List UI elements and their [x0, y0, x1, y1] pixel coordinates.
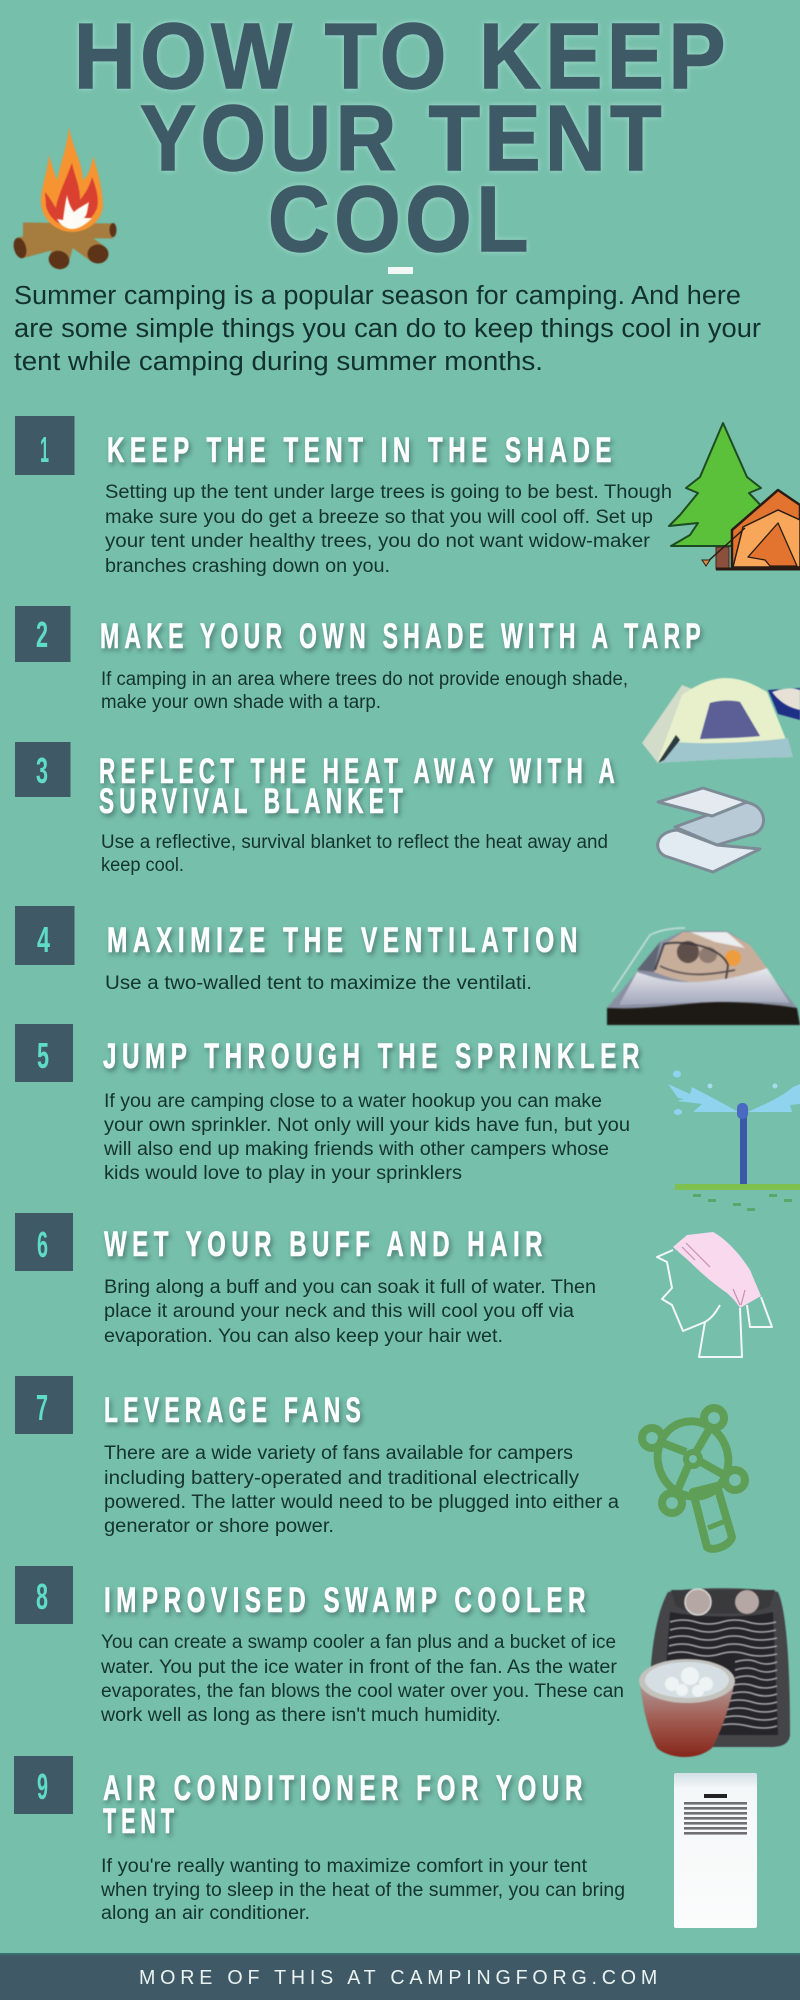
panel: tip 2	[0, 606, 800, 2000]
footer: MORE OF THIS AT CAMPINGFORG.COM	[139, 1966, 662, 1989]
number badge 9	[14, 1756, 73, 1814]
body 9: If you're really wanting to maximize comfort in your tent	[101, 1856, 588, 1877]
decorative dash	[388, 267, 413, 274]
body 2: make your own shade with a tarp.	[101, 692, 381, 713]
panel: tip 6	[15, 1213, 772, 1357]
body 5: your own sprinkler. Not only will your kids have fun, but you	[104, 1115, 630, 1136]
intro text	[14, 282, 762, 376]
number badge 5	[15, 1024, 73, 1082]
icon: dome tent with tarp	[642, 678, 800, 763]
heading 9: AIR CONDITIONER FOR YOUR	[103, 1769, 588, 1808]
body 1: Setting up the tent under large trees is going to be best. Though	[105, 482, 672, 503]
body 3	[101, 832, 608, 876]
body 7: generator or shore power.	[104, 1516, 334, 1537]
body 3: keep cool.	[101, 855, 184, 876]
icon: hand fan	[642, 1408, 745, 1549]
body 5	[103, 1091, 630, 1184]
number badge 3	[15, 742, 70, 797]
body 2: If camping in an area where trees do not provide enough shade,	[101, 669, 628, 690]
body 6: Bring along a buff and you can soak it full of water. Then	[104, 1277, 596, 1298]
icon: tree and tent	[669, 423, 800, 569]
heading 9: TENT	[103, 1802, 179, 1841]
intro text: are some simple things you can do to keep things cool in your	[14, 315, 762, 343]
number badge 1	[15, 416, 74, 475]
icon: heater fan and ice bucket	[639, 1588, 790, 1757]
number badge 2: 2	[36, 614, 48, 655]
title: COOL	[268, 167, 533, 271]
number badge 8	[15, 1566, 73, 1624]
body 1: make sure you do get a breeze so that you will cool off. Set up	[105, 507, 653, 528]
heading 3	[99, 752, 620, 821]
number badge 3: 3	[36, 750, 48, 791]
number badge 2	[15, 606, 70, 662]
body 9: when trying to sleep in the heat of the summer, you can bring	[100, 1880, 625, 1901]
body 1: branches crashing down on you.	[105, 556, 390, 577]
body 8: water. You put the ice water in front of the fan. As the water	[100, 1657, 618, 1678]
body 5: will also end up making friends with other campers whose	[103, 1139, 609, 1160]
heading 4: MAXIMIZE THE VENTILATION	[107, 921, 583, 960]
heading 3: SURVIVAL BLANKET	[99, 782, 408, 821]
number badge 7: 7	[36, 1387, 48, 1428]
panel: tip 1	[15, 416, 800, 577]
icon: head wearing buff	[657, 1232, 772, 1357]
body 5: kids would love to play in your sprinklers	[104, 1163, 462, 1184]
body 8: work well as long as there isn't much humidity.	[100, 1705, 501, 1726]
title: HOW TO KEEP	[74, 4, 730, 108]
icon: tent at sunset	[607, 928, 800, 1025]
intro text: tent while camping during summer months.	[14, 348, 543, 376]
heading 7: LEVERAGE FANS	[104, 1391, 366, 1430]
heading 8: IMPROVISED SWAMP COOLER	[104, 1581, 591, 1620]
body 2	[101, 669, 628, 713]
body 5: If you are camping close to a water hookup you can make	[104, 1091, 602, 1112]
footer	[0, 1953, 800, 2000]
body 7: including battery-operated and traditional electrically	[104, 1468, 580, 1489]
number badge 8: 8	[36, 1576, 48, 1617]
icon: survival blanket	[658, 788, 764, 872]
number badge 1: 1	[40, 429, 49, 470]
heading 9	[103, 1769, 588, 1841]
number badge 7	[15, 1376, 73, 1434]
panel: tip 8	[15, 1566, 790, 1757]
panel: tip 3	[15, 742, 764, 876]
body 9: along an air conditioner.	[101, 1903, 310, 1924]
body 6	[104, 1277, 596, 1347]
intro text: Summer camping is a popular season for camping. And here	[14, 282, 741, 310]
number badge 5: 5	[37, 1035, 49, 1076]
title	[74, 4, 730, 271]
body 8: evaporates, the fan blows the cool water over you. These can	[101, 1681, 624, 1702]
number badge 4: 4	[37, 919, 50, 960]
panel: tip 7	[15, 1376, 745, 1549]
number badge 9: 9	[37, 1766, 48, 1807]
body 7: powered. The latter would need to be plugged into either a	[104, 1492, 619, 1513]
icon: campfire	[11, 126, 116, 272]
body 1	[105, 482, 672, 577]
number badge 4	[15, 906, 74, 965]
body 4: Use a two-walled tent to maximize the ventilati.	[105, 973, 532, 994]
heading 6: WET YOUR BUFF AND HAIR	[104, 1225, 548, 1264]
body 8	[100, 1632, 624, 1726]
panel: tip 9	[14, 1756, 757, 1928]
number badge 6: 6	[37, 1224, 48, 1265]
icon: air conditioner	[674, 1773, 757, 1928]
icon: sprinkler	[668, 1070, 800, 1211]
body 7	[104, 1443, 619, 1537]
body 8: You can create a swamp cooler a fan plus and a bucket of ice	[101, 1632, 616, 1653]
panel: tip 5	[15, 1024, 800, 1211]
title: YOUR TENT	[140, 86, 666, 190]
body 1: your tent under healthy trees, you do not want widow-maker	[105, 531, 651, 552]
body 9	[100, 1856, 625, 1924]
body 6: place it around your neck and this will cool you off via	[104, 1301, 574, 1322]
number badge 6	[15, 1213, 73, 1271]
body 6: evaporation. You can also keep your hair wet.	[104, 1326, 503, 1347]
body 3: Use a reflective, survival blanket to reflect the heat away and	[101, 832, 608, 853]
body 7: There are a wide variety of fans available for campers	[104, 1443, 573, 1464]
panel: tip 4	[15, 906, 800, 1025]
